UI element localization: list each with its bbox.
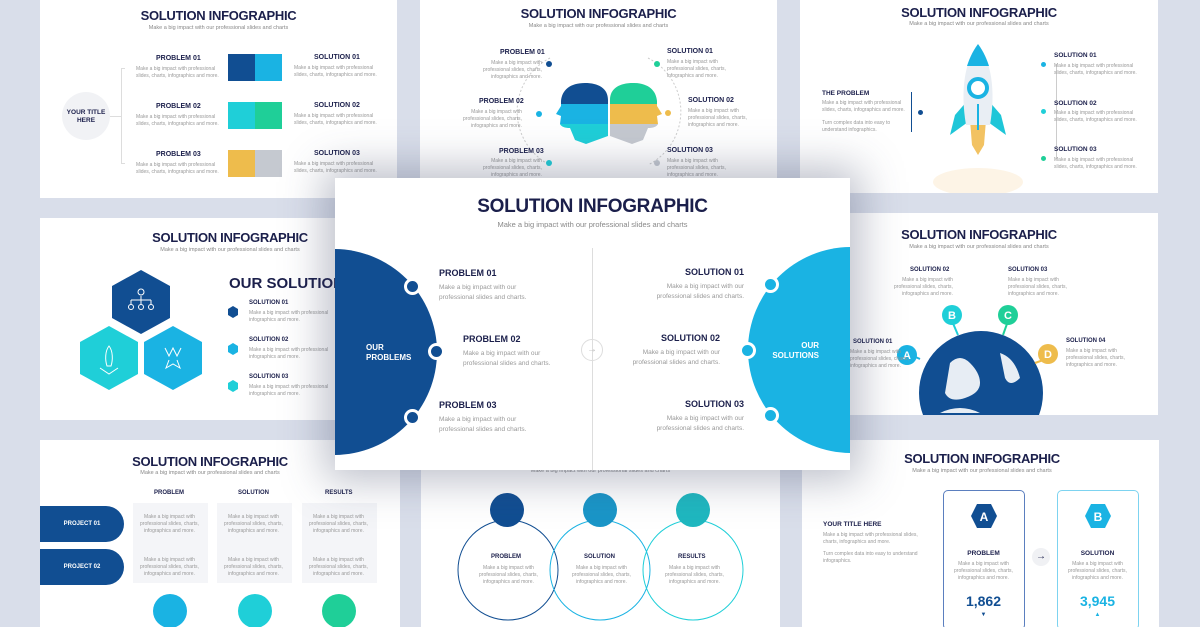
arrow: → [1036,551,1046,562]
slide: projects table [40,440,400,627]
slide: projects table: infographics and more. [144,571,195,577]
solution dots [742,278,779,422]
slide: rocket [800,0,1158,193]
main slide: PROBLEM 01 [439,268,497,278]
main slide: Make a big impact with our [439,284,516,291]
card A: PROBLEM [967,550,1000,557]
slide: heads: professional slides, charts, [667,66,726,72]
card A: A [980,510,989,524]
project pills [40,506,124,585]
slide: projects table: professional slides, charts, [224,564,283,570]
slide: globe: professional slides, charts, [1008,284,1067,290]
slide: heads: infographics and more. [667,73,718,79]
card B: professional slides, charts, [1068,568,1127,574]
slide: globe: SOLUTION 01 [853,339,892,345]
slide: globe: infographics and more. [1066,362,1117,368]
the problem [822,90,923,133]
slide: projects table: professional slides, charts, [140,521,199,527]
your title text [823,521,918,564]
slide: cards: Make a big impact with professional slides, [823,532,918,538]
slide: heads: professional slides, charts, [463,116,522,122]
slide: projects table: professional slides, charts, [309,564,368,570]
slide: puzzle: PROBLEM 02 [156,103,201,110]
arrow circle [581,339,603,361]
slide: hexagons: Make a big impact with professional [249,310,328,316]
card A: 1,862 [966,593,1001,609]
slide: rocket: SOLUTION 03 [1054,146,1097,153]
slide: rocket: SOLUTION 02 [1054,100,1097,107]
slide: puzzle: Make a big impact with professional [294,161,373,167]
boxes [133,503,377,583]
slide: venn: infographics and more. [669,579,720,585]
slide: heads: PROBLEM 03 [499,148,544,155]
slide: puzzle: slides, charts, infographics and more. [294,72,377,78]
slide: hexagons: SOLUTION 02 [249,337,288,343]
slide: globe: Make a big impact with [902,277,953,283]
slide: puzzle: Make a big impact with professional [294,113,373,119]
globe: B [948,310,956,322]
slide: globe: professional slides, charts, [894,284,953,290]
slide: hexagons [40,218,400,420]
main slide: professional slides and charts. [633,359,720,366]
slide: globe: infographics and more. [902,291,953,297]
divider [592,248,593,470]
hexagons [80,270,202,390]
title: SOLUTION INFOGRAPHIC [152,230,308,245]
heads [516,58,682,166]
slide: projects table: RESULTS [325,490,353,496]
slide: hexagons: Make a big impact with our professional slides and charts [160,247,300,253]
problem labels [463,49,545,178]
slide: cards: charts, infographics and more. [823,539,890,545]
slide: projects table: infographics and more. [313,528,364,534]
main slide: Make a big impact with our [667,415,744,422]
slide: heads [420,0,777,178]
slide: projects table: SOLUTION [238,490,269,496]
main slide: professional slides and charts. [439,426,526,433]
slide: puzzle: Make a big impact with our professional slides and charts [149,25,288,31]
slide: puzzle: SOLUTION 03 [314,150,360,157]
card B: Make a big impact with [1072,561,1123,567]
solutions [294,54,377,174]
slide: venn: SOLUTION [584,554,615,560]
card A [943,490,1025,627]
slide: projects table: infographics and more. [144,528,195,534]
slide: cards [802,440,1159,627]
card A: Make a big impact with [958,561,1009,567]
slide: heads: Make a big impact with our professional slides and charts [529,23,668,29]
slide: rocket: understand infographics. [822,127,877,133]
slide: globe: SOLUTION 02 [910,267,949,273]
slide: puzzle: Make a big impact with professional [136,162,215,168]
slide: venn: professional slides, charts, [572,572,631,578]
card A: infographics and more. [958,575,1009,581]
slide: venn: Make a big impact with our professional slides and charts [531,468,670,474]
slide: venn: Make a big impact with [576,565,627,571]
main slide: PROBLEM 02 [463,334,521,344]
slide: rocket: Make a big impact with professional [1054,157,1133,163]
slide: projects table: Make a big impact with [313,514,364,520]
rocket [933,44,1023,193]
circle: your title [62,92,110,140]
slide: projects table: professional slides, charts, [140,564,199,570]
slide: globe: Make a big impact with [1008,277,1059,283]
main slide: Make a big impact with our [667,283,744,290]
main slide: professional slides and charts. [463,360,550,367]
slide: rocket: slides, charts, infographics and more. [1054,117,1137,123]
slide: rocket: THE PROBLEM [822,90,869,97]
slide: puzzle: slides, charts, infographics and more. [136,73,219,79]
slide: heads: Make a big impact with [688,108,739,114]
slide: heads: infographics and more. [688,122,739,128]
card A: professional slides, charts, [954,568,1013,574]
globe: C [1004,310,1012,322]
slide: cards: Make a big impact with our professional slides and charts [912,468,1052,474]
slide: globe: infographics and more. [850,363,901,369]
main slide: professional slides and charts. [657,293,744,300]
circle: your title: YOUR TITLE [67,109,105,116]
slide: puzzle: Make a big impact with professional [136,66,215,72]
main slide [335,178,850,470]
venn labels [479,554,724,585]
circle: your title: HERE [77,117,95,124]
slide: hexagons: OUR SOLUTION: [229,275,349,292]
slide: heads: SOLUTION 01 [667,48,713,55]
icons [153,594,356,627]
title: SOLUTION INFOGRAPHIC [521,6,676,21]
subtitle: Make a big impact with our professional slides and charts [497,220,688,229]
slide: puzzle: SOLUTION 01 [314,54,360,61]
slide: globe [850,213,1158,415]
slide: puzzle [40,0,397,198]
slide: heads: PROBLEM 01 [500,49,545,56]
slide: hexagons: SOLUTION 01 [249,300,288,306]
slide: venn: professional slides, charts, [665,572,724,578]
slide: heads: Make a big impact with [491,158,542,164]
slide: projects table: PROBLEM [154,490,184,496]
slide: cards: infographics. [823,558,851,564]
slide: rocket: Turn complex data into easy to [822,120,890,126]
slide: globe: professional slides, charts, [1066,355,1125,361]
card B: SOLUTION [1081,550,1114,557]
card A: ▼ [981,612,986,618]
slide: puzzle: PROBLEM 03 [156,151,201,158]
half circle: our solutions: SOLUTIONS [772,351,819,360]
slide: globe: Make a big impact with [850,349,901,355]
slide: heads: SOLUTION 02 [688,97,734,104]
solutions [1041,52,1137,170]
slide: venn: PROBLEM [491,554,521,560]
title: SOLUTION INFOGRAPHIC [477,196,708,217]
arrow circle: → [587,344,597,355]
solution labels [667,48,747,178]
card B: B [1094,510,1103,524]
slide: heads: PROBLEM 02 [479,98,524,105]
slide: heads: Make a big impact with [667,158,718,164]
main slide: SOLUTION 02 [661,333,720,343]
slide: venn: Make a big impact with [669,565,720,571]
slide: heads: infographics and more. [491,74,542,80]
slide: puzzle: Make a big impact with professional [136,114,215,120]
main slide: PROBLEM 03 [439,400,497,410]
our solution list [228,275,349,397]
slide: puzzle: PROBLEM 01 [156,55,201,62]
slide: globe: Make a big impact with our professional slides and charts [909,244,1049,250]
slide: projects table: Make a big impact with [228,514,279,520]
slide: venn: professional slides, charts, [479,572,538,578]
arrow [1032,548,1050,566]
main slide: professional slides and charts. [657,425,744,432]
slide: rocket: slides, charts, infographics and more. [1054,70,1137,76]
card B: infographics and more. [1072,575,1123,581]
slide: puzzle: slides, charts, infographics and more. [294,120,377,126]
title: SOLUTION INFOGRAPHIC [901,227,1057,242]
slide: puzzle: slides, charts, infographics and more. [294,168,377,174]
globe: D [1044,349,1052,361]
slide: puzzle: slides, charts, infographics and more. [136,169,219,175]
slide: projects table: PROJECT 02 [64,564,100,570]
slide: cards: YOUR TITLE HERE [823,521,882,528]
globe [897,305,1058,415]
slide: puzzle: slides, charts, infographics and more. [136,121,219,127]
venn circles [458,493,744,620]
slide: cards: Turn complex data into easy to understand [823,551,918,557]
slide: hexagons: Make a big impact with professional [249,347,328,353]
slide: rocket: slides, charts, infographics and more. [1054,164,1137,170]
slide: puzzle: SOLUTION 02 [314,102,360,109]
slide: globe: Make a big impact with [1066,348,1117,354]
slide: hexagons: SOLUTION 03 [249,374,288,380]
slide: rocket: Make a big impact with professional [822,100,901,106]
slide: projects table: PROJECT 01 [64,521,100,527]
half circle: our solutions: OUR [801,341,819,350]
slide: projects table: Make a big impact with [144,557,195,563]
slide: projects table: infographics and more. [228,528,279,534]
slide: rocket: Make a big impact with our professional slides and charts [909,21,1049,27]
card B: ▲ [1095,612,1100,618]
globe: A [903,350,911,362]
slide: globe: SOLUTION 03 [1008,267,1047,273]
title: SOLUTION INFOGRAPHIC [141,8,296,23]
slide: projects table: Make a big impact with [313,557,364,563]
slide: globe: SOLUTION 04 [1066,338,1105,344]
slide: venn: infographics and more. [483,579,534,585]
main slide: Make a big impact with our [439,416,516,423]
slide: projects table: infographics and more. [313,571,364,577]
problem texts [439,268,550,433]
puzzle pieces [228,54,282,177]
problem dots [404,280,442,424]
solution labels [850,266,1125,369]
slide: projects table: Make a big impact with [228,557,279,563]
slide: heads: infographics and more. [471,123,522,129]
slide: projects table: professional slides, charts, [224,521,283,527]
slide: heads: Make a big impact with [667,59,718,65]
title: SOLUTION INFOGRAPHIC [901,5,1057,20]
title: SOLUTION INFOGRAPHIC [132,454,288,469]
slide: heads: Make a big impact with [491,60,542,66]
slide: venn: Make a big impact with [483,565,534,571]
slide: rocket: SOLUTION 01 [1054,52,1097,59]
main slide: SOLUTION 01 [685,267,744,277]
slide: projects table: Make a big impact with our professional slides and charts [140,470,280,476]
half circle: our problems: OUR [366,343,384,352]
slide: heads: professional slides, charts, [483,67,542,73]
slide: puzzle: Make a big impact with professional [294,65,373,71]
slide: rocket: Make a big impact with professional [1054,110,1133,116]
main slide: SOLUTION 03 [685,399,744,409]
slide: venn: RESULTS [678,554,706,560]
main slide: Make a big impact with our [643,349,720,356]
main slide: Make a big impact with our [463,350,540,357]
half circle: our problems [231,249,437,455]
card B [1057,490,1139,627]
slide: projects table: Make a big impact with [144,514,195,520]
card B: 3,945 [1080,593,1115,609]
problems [136,55,219,175]
slide: projects table: infographics and more. [228,571,279,577]
title: SOLUTION INFOGRAPHIC [904,451,1060,466]
column headings [154,490,353,496]
solution texts [633,267,744,432]
half circle: our solutions [748,247,954,453]
slide: heads: infographics and more. [491,172,542,178]
slide: heads: SOLUTION 03 [667,147,713,154]
slide: hexagons: Make a big impact with professional [249,384,328,390]
slide: heads: professional slides, charts, [667,165,726,171]
slide: heads: professional slides, charts, [688,115,747,121]
slide: venn [421,440,780,627]
slide: rocket: Make a big impact with professional [1054,63,1133,69]
slide: heads: Make a big impact with [471,109,522,115]
main slide: professional slides and charts. [439,294,526,301]
slide: hexagons: infographics and more. [249,391,300,397]
slide: rocket: slides, charts, infographics and more. [822,107,905,113]
half circle: our problems: PROBLEMS [366,353,411,362]
slide: heads: infographics and more. [667,172,718,178]
slide: globe: infographics and more. [1008,291,1059,297]
slide: hexagons: infographics and more. [249,354,300,360]
slide: globe: professional slides, charts, [850,356,909,362]
slide: projects table: professional slides, charts, [309,521,368,527]
slide: venn: infographics and more. [576,579,627,585]
slide: heads: professional slides, charts, [483,165,542,171]
slide: hexagons: infographics and more. [249,317,300,323]
